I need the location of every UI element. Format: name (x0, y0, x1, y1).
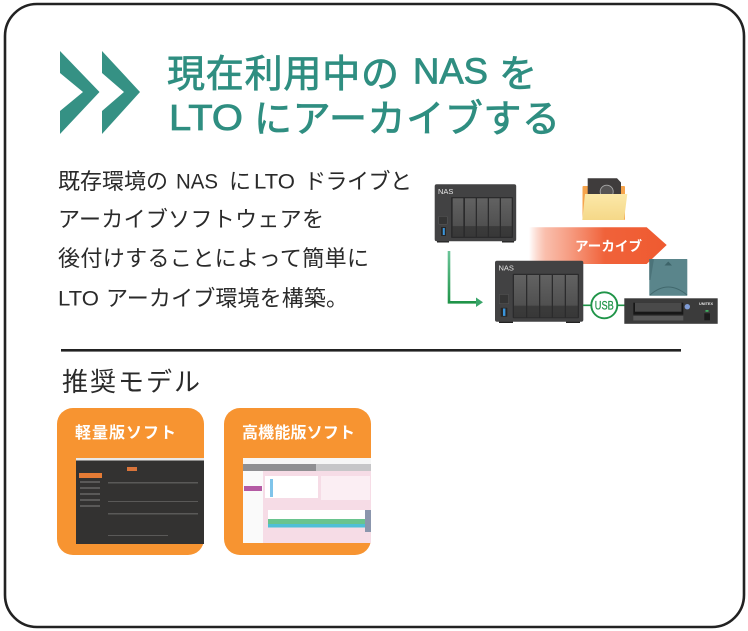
icon: USB connector (583, 292, 625, 318)
card: lightweight software (57, 408, 204, 555)
icon: folder with media (582, 178, 627, 220)
arrow: archive arrow (529, 227, 667, 264)
intro text block (58, 169, 412, 311)
intro text block: LTO (254, 170, 295, 194)
icon: added NAS: NAS (498, 264, 514, 272)
title: を (499, 54, 537, 96)
intro text block: LTO (58, 288, 99, 310)
card: high-function software (224, 408, 371, 555)
title: NAS (413, 50, 488, 92)
heading: recommended models: 推奨モデル (62, 367, 200, 397)
intro text block: 既存環境の (58, 169, 168, 194)
icon: LTO drive: UNITEX (699, 302, 713, 306)
title: LTO (169, 97, 243, 138)
icon: LTO drive (624, 298, 718, 324)
icon: double chevron (60, 51, 140, 134)
screenshot: light UI (243, 458, 371, 543)
arrow: green migration arrow (449, 251, 483, 307)
intro text block: ドライブと (304, 169, 412, 194)
title (167, 50, 560, 141)
icon: existing NAS: NAS (438, 187, 453, 196)
icon: USB connector: USB (595, 299, 614, 313)
diagram: NAS to LTO archive (435, 178, 718, 324)
arrow: archive arrow: アーカイブ (575, 238, 642, 254)
intro text block: 後付けすることによって簡単に (58, 246, 369, 271)
icon: LTO tape cartridge (649, 259, 687, 296)
divider (61, 349, 681, 352)
screenshot: dark UI (76, 458, 204, 544)
title: 現在利用中の (167, 54, 399, 96)
intro text block: アーカイブ環境を構築。 (106, 286, 348, 311)
intro text block: に (229, 169, 251, 194)
icon: added NAS (495, 261, 583, 323)
title: にアーカイブする (254, 99, 560, 141)
card: lightweight software: 軽量版ソフト (75, 424, 176, 442)
card: high-function software: 高機能版ソフト (242, 423, 355, 442)
intro text block: NAS (176, 170, 218, 194)
icon: existing NAS (435, 184, 516, 242)
intro text block: アーカイブソフトウェアを (58, 207, 324, 232)
